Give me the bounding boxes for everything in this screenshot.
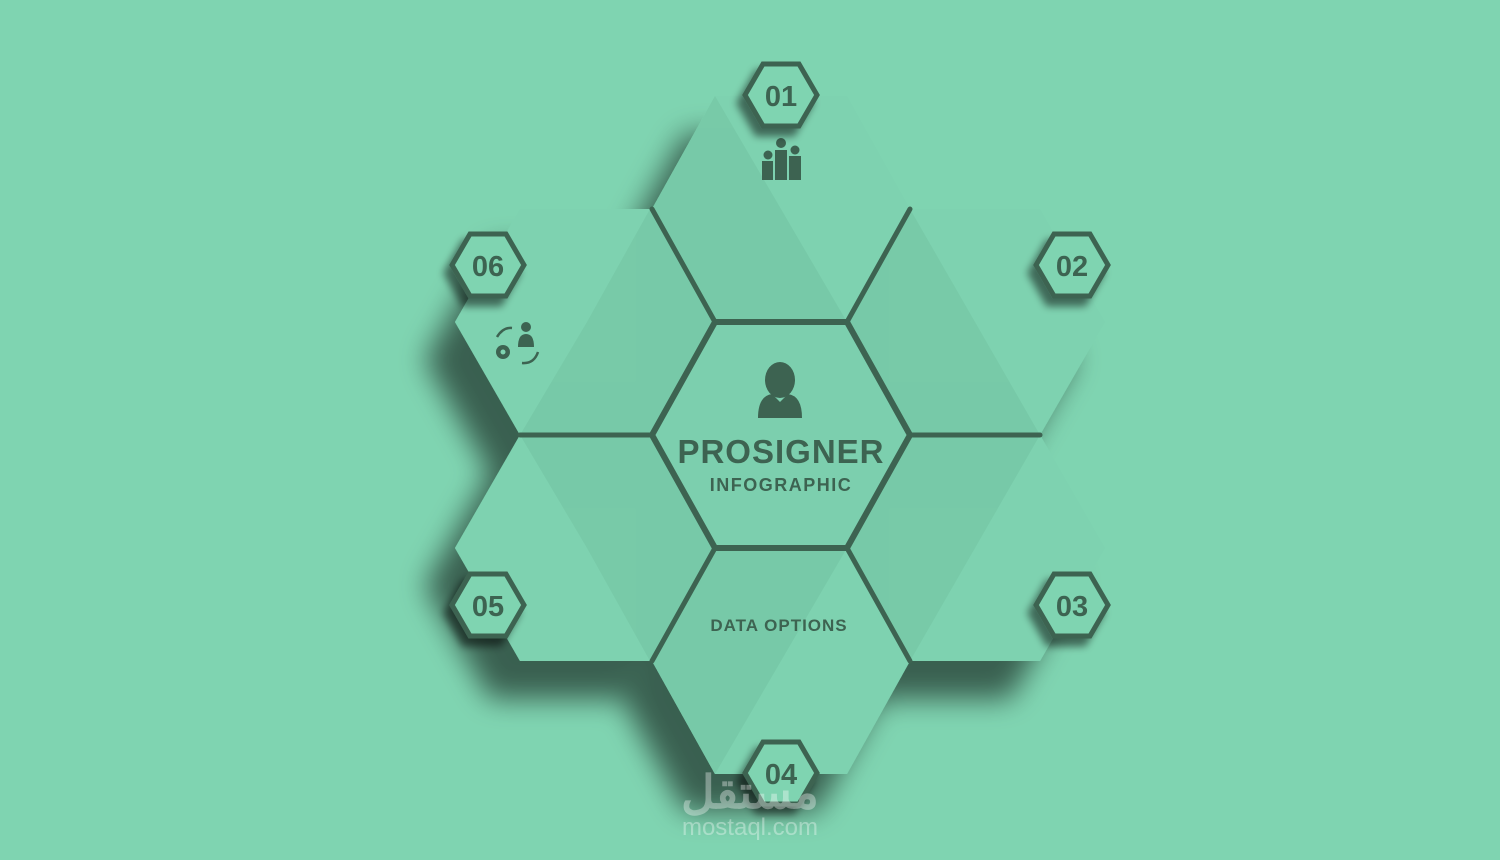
badge 01: 01 [765, 81, 797, 113]
watermark: mostaql.com [682, 814, 818, 841]
center title: PROSIGNER [677, 433, 885, 470]
badge 06 [452, 234, 524, 296]
hexagon cluster [455, 96, 1105, 774]
center title: INFOGRAPHIC [710, 475, 852, 495]
center title [677, 362, 885, 495]
badge 06: 06 [472, 251, 504, 283]
badge 02 [1036, 234, 1108, 296]
icon: people group [762, 138, 801, 180]
watermark [681, 766, 819, 841]
watermark: مستقل [681, 766, 819, 818]
badge 03 [1036, 574, 1108, 636]
badge 03: 03 [1056, 591, 1088, 623]
badge 04: 04 [765, 759, 797, 791]
spokes [520, 209, 1040, 661]
text: data options: DATA OPTIONS [710, 616, 848, 635]
icon: person [758, 362, 802, 418]
number badges [452, 64, 1108, 804]
badge 02: 02 [1056, 251, 1088, 283]
facets [520, 96, 1040, 774]
center hexagon [652, 322, 910, 548]
petal shapes with shadow [455, 96, 1105, 774]
badge 04 [745, 742, 817, 804]
badge 05: 05 [472, 591, 504, 623]
icon: gear and person [496, 322, 538, 363]
badge 05 [452, 574, 524, 636]
badge 01 [745, 64, 817, 126]
